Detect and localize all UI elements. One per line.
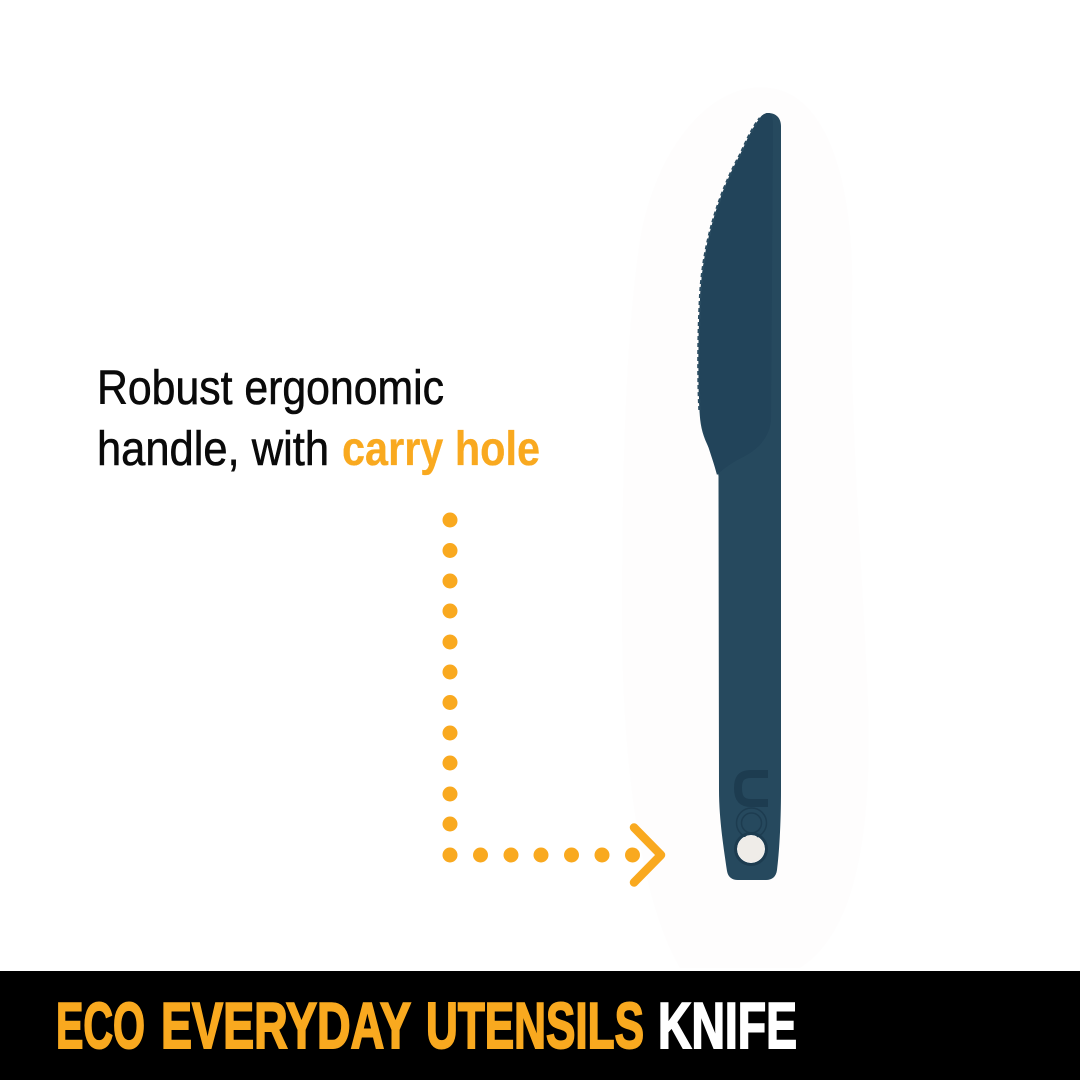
illustration: knife [698,113,781,880]
footer title: UTENSILS [426,989,644,1062]
knife blade [698,113,773,475]
highlighted words: carry hole: carry hole [342,423,540,476]
carry hole [736,834,766,864]
text block: knife handle description: handle, with [97,423,329,476]
text block: knife handle description [97,362,540,476]
footer title: KNIFE [658,989,797,1062]
text block: knife handle description: Robust ergonomic [97,362,444,415]
logo: embossed rings [736,808,766,838]
arrow: dotted pointer to carry hole [442,512,661,882]
blade serrations [698,118,760,410]
footer title: EVERYDAY [161,989,411,1062]
footer band [0,971,1080,1080]
logo: embossed U [738,774,768,803]
footer title: ECO [56,989,145,1062]
footer title [56,989,797,1062]
